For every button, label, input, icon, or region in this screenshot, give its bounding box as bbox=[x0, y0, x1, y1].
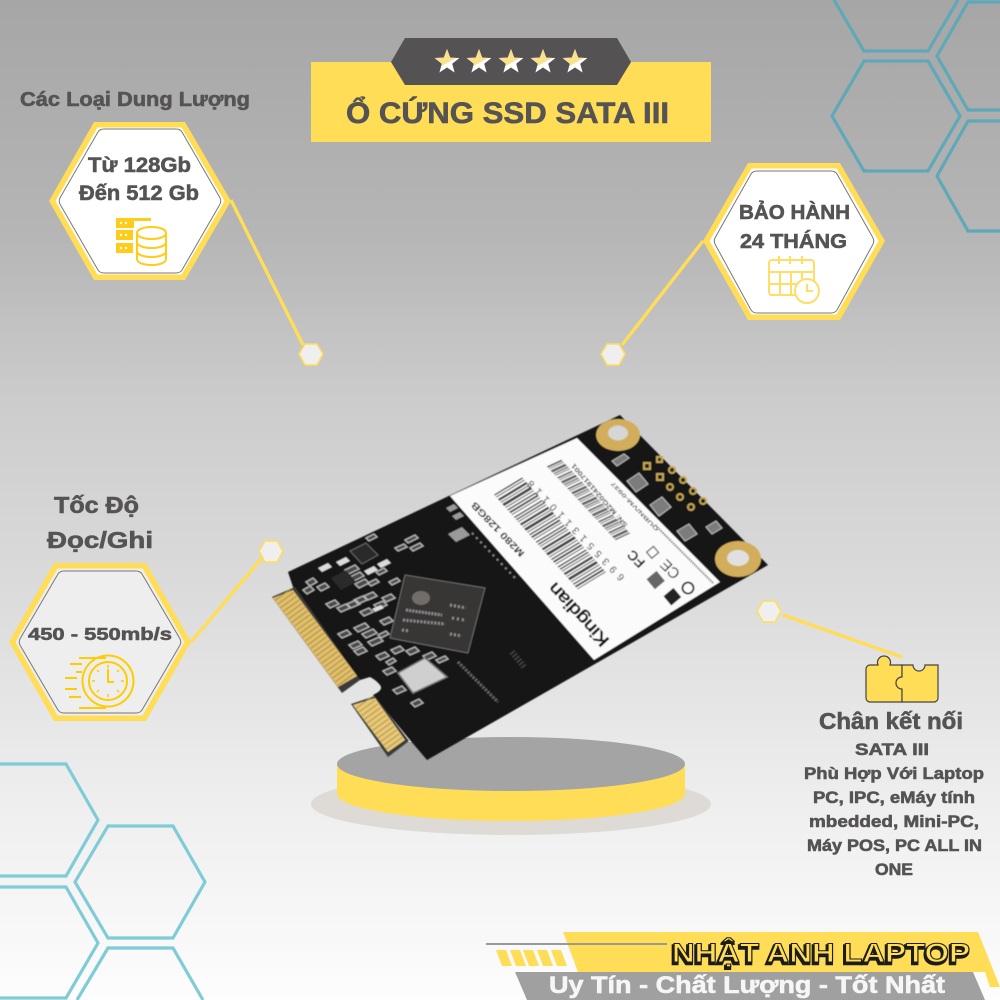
connector description: Chân kết nối bbox=[819, 708, 963, 734]
certification marks: FC bbox=[624, 547, 648, 571]
label model text: M280 128GB bbox=[469, 499, 527, 559]
icon: calendar with clock bbox=[769, 256, 819, 303]
teal hexagons top right bbox=[832, 0, 1000, 231]
capacity text bbox=[79, 154, 199, 205]
brand name: NHẬT ANH LAPTOP bbox=[671, 939, 969, 970]
title banner bbox=[311, 38, 711, 142]
heading: read write speed: Tốc Độ bbox=[54, 492, 139, 518]
SSD board bbox=[272, 415, 768, 760]
white product label bbox=[450, 438, 720, 660]
warranty hexagon bbox=[703, 163, 885, 320]
brand name: NHẬT ANH LAPTOP bbox=[672, 937, 970, 968]
connector description: Phù Hợp Với Laptop bbox=[804, 764, 984, 783]
mounting rings bbox=[596, 419, 761, 577]
certification marks: CE bbox=[657, 555, 684, 582]
connector description: ONE bbox=[875, 860, 913, 879]
gold connector lower bbox=[351, 696, 409, 757]
connector description bbox=[804, 708, 984, 879]
controller chip bbox=[390, 575, 485, 653]
speed text: 450 - 550mb/s bbox=[28, 624, 172, 644]
connector description: Máy POS, PC ALL IN bbox=[807, 836, 982, 855]
icon: fast clock bbox=[65, 656, 134, 708]
icon: puzzle bbox=[866, 656, 938, 702]
right side components bbox=[612, 454, 722, 541]
decorative stripes bbox=[496, 950, 567, 966]
certification marks bbox=[624, 546, 694, 605]
capacity hexagon bbox=[49, 122, 231, 280]
slogan: Uy Tín - Chất Lượng - Tốt Nhất bbox=[549, 972, 945, 999]
warranty text: BẢO HÀNH bbox=[739, 201, 850, 224]
icon: server and database bbox=[116, 218, 166, 265]
fine print bbox=[657, 527, 713, 583]
warranty text bbox=[739, 201, 850, 253]
capacity text: Đến 512 Gb bbox=[79, 182, 199, 205]
main barcode bbox=[508, 486, 593, 582]
heading: read write speed: Đọc/Ghi bbox=[47, 527, 153, 553]
connector description: PC, IPC, eMáy tính bbox=[813, 788, 975, 807]
label brand text: Kingdian bbox=[544, 579, 613, 650]
teal hexagons bottom left bbox=[0, 764, 205, 1000]
components bbox=[303, 504, 525, 707]
platform bbox=[311, 737, 711, 835]
spec text: QUBN/VM-0937 bbox=[610, 480, 660, 532]
PCB bbox=[288, 415, 768, 760]
node markers bbox=[259, 344, 781, 622]
connector description: mbedded, Mini-PC, bbox=[809, 812, 979, 831]
capacity text: Từ 128Gb bbox=[88, 154, 191, 177]
connector lines bbox=[191, 200, 902, 657]
heading: capacity types: Các Loại Dung Lượng bbox=[20, 88, 250, 111]
speed hexagon bbox=[9, 563, 191, 721]
heading: read write speed bbox=[47, 492, 153, 553]
title text: Ổ CỨNG SSD SATA III bbox=[346, 96, 669, 130]
pin header bbox=[644, 457, 706, 510]
footer brand banner bbox=[486, 932, 1000, 1000]
rating stars bbox=[435, 49, 587, 72]
gold connector upper bbox=[272, 587, 360, 693]
barcode digits: 6 9 3 5 5 1 3 1 1 0 1 1 8 bbox=[525, 477, 627, 583]
serial barcode bbox=[554, 463, 623, 537]
serial text: SN: M2G0241917001 bbox=[570, 461, 630, 528]
warranty text: 24 THÁNG bbox=[740, 230, 847, 253]
connector description: SATA III bbox=[855, 740, 929, 759]
